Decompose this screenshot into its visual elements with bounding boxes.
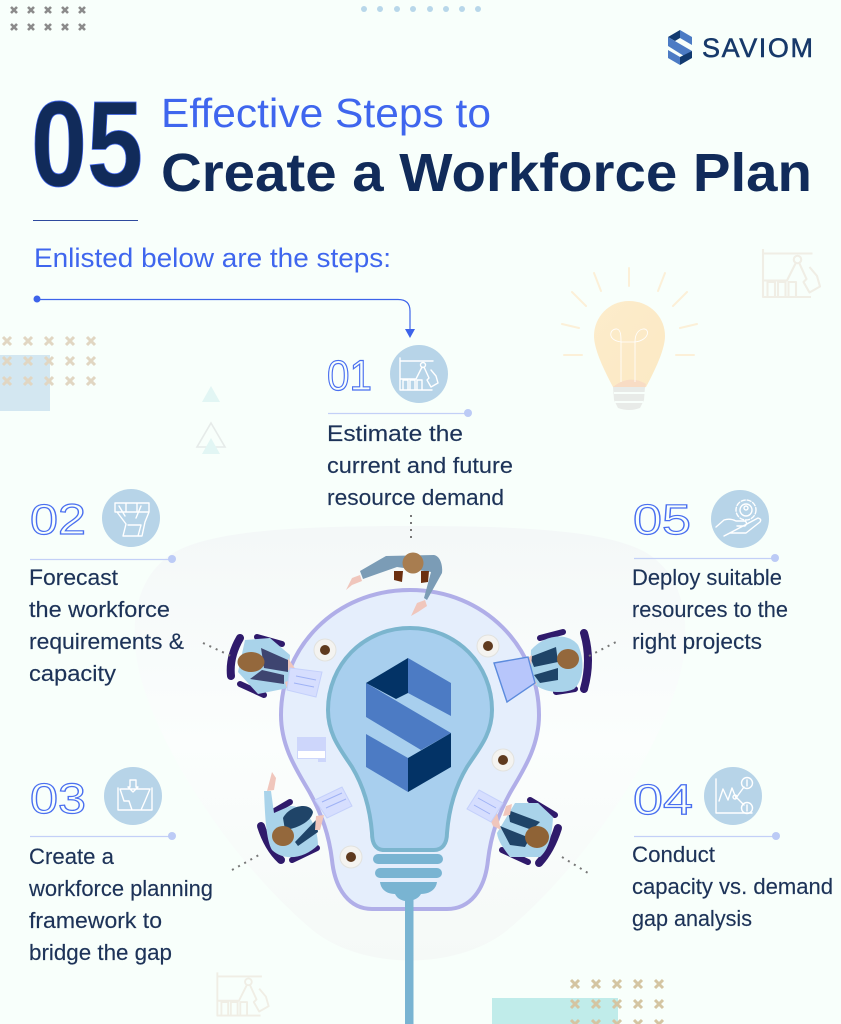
decoration: triangles [197,386,225,454]
decoration: bottom block and crosses [492,980,663,1024]
text: step 02: Forecast [29,565,118,590]
heading: Effective Steps to: Effective Steps to [161,90,491,136]
subheading: Enlisted below are the steps: [34,243,391,273]
text: step 02: capacity [29,661,116,686]
decoration: top dots [361,6,481,12]
logo: Saviom [668,30,813,65]
step 03 [28,767,213,965]
laptop on table [297,737,326,762]
icon: hand with gear [711,490,769,548]
step 01 [327,345,513,510]
text: step 05: right projects [632,629,762,654]
connector dots [203,515,616,873]
text: step 03: framework to [29,908,162,933]
text: step 02: requirements & [29,629,184,654]
text: step 04: capacity vs. demand [632,874,833,899]
step 03: 03 [30,775,86,823]
person upper right with laptop [494,632,588,702]
step 04: 04 [633,776,693,824]
text: step 04: gap analysis [632,906,752,931]
person upper left [231,637,322,697]
coffee cups [314,635,514,868]
decoration: top-left cross grid [11,7,85,30]
step 05: 05 [633,496,691,544]
text: step 05: Deploy suitable [632,565,782,590]
text: step 04: Conduct [632,842,715,867]
person lower right [467,790,558,863]
icon: chart with hand [390,345,448,403]
decoration: faded chart icon bottom [217,972,269,1016]
central soft background shape [135,526,685,960]
step 02 [29,489,184,686]
icon: gap framework [104,767,162,825]
icon: hands with plan [102,489,160,547]
text: step 03: workforce planning [28,876,213,901]
person lower left [261,772,352,860]
title number 05: 05 [31,76,143,212]
text: step 01: Estimate the [327,421,463,446]
decoration: faded chart icon top right [763,249,820,297]
text: step 05: resources to the [632,597,788,622]
meeting table shaped like a bulb [281,590,539,909]
decoration: left crosses and block [0,337,95,411]
logo: Saviom: SAVIOM [702,33,813,63]
heading: Create a Workforce Plan: Create a Workforce Plan [161,143,812,203]
icon: gap analysis chart [704,767,762,825]
center S logo [366,658,451,792]
step 02: 02 [30,496,86,544]
text: step 01: resource demand [327,485,504,510]
decoration: faded light bulb [562,268,697,410]
text: step 03: Create a [29,844,115,869]
person top [346,552,442,616]
text: step 03: bridge the gap [29,940,172,965]
text: step 02: the workforce [29,597,170,622]
text: step 01: current and future [327,453,513,478]
step 05 [632,490,788,654]
center bulb with stem [328,628,492,1024]
arrow to step 01 [34,296,415,338]
step 04 [632,767,833,931]
step 01: 01 [327,352,372,400]
